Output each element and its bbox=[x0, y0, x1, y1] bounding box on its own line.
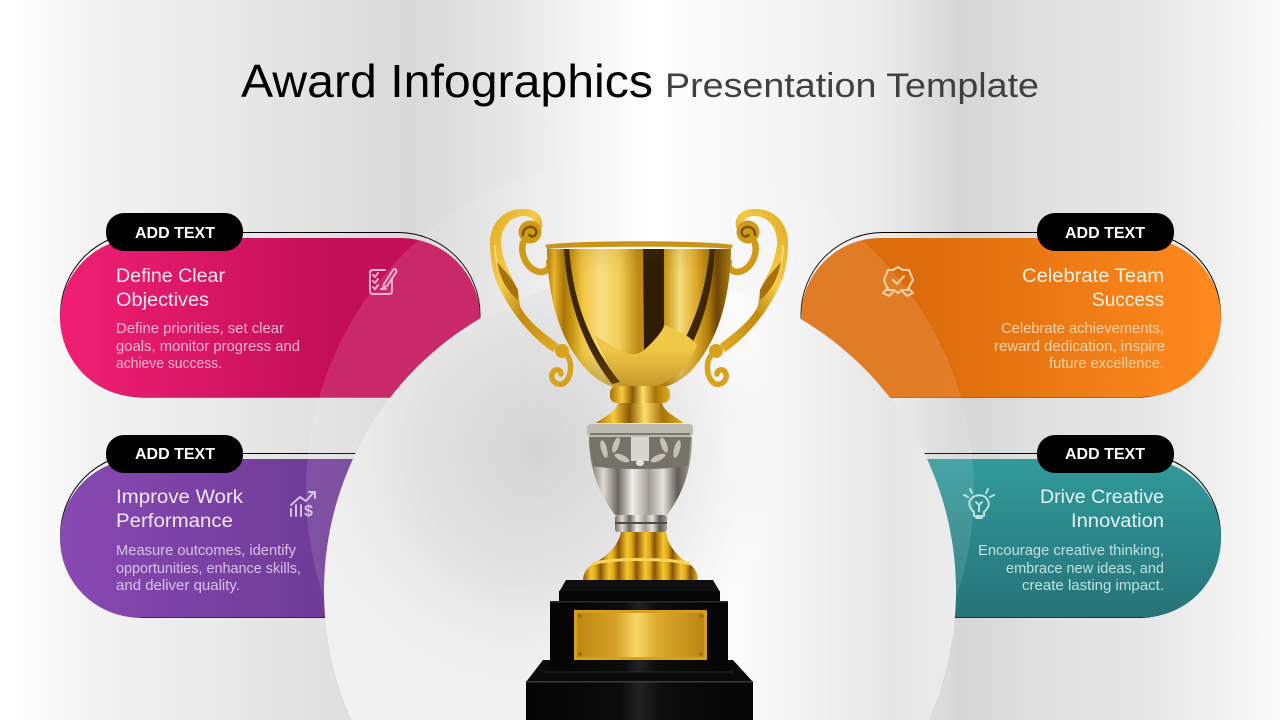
text: drive creative innovation: Encourage creative thinking, bbox=[978, 543, 1164, 559]
text: define clear objectives: goals, monitor progress and bbox=[116, 339, 300, 355]
label pill: top right: ADD TEXT bbox=[1065, 225, 1145, 242]
text: drive creative innovation bbox=[978, 487, 1164, 594]
right handle bbox=[707, 209, 788, 384]
label pill: bottom left bbox=[106, 435, 243, 473]
text: improve work performance bbox=[116, 487, 301, 594]
gold bowl bbox=[547, 249, 731, 387]
label pill: bottom left: ADD TEXT bbox=[135, 446, 215, 463]
text: celebrate team success: Success bbox=[1092, 290, 1164, 311]
gold foot bbox=[583, 532, 698, 585]
label pill: top right bbox=[1037, 213, 1174, 251]
text: celebrate team success: future excellence. bbox=[1049, 356, 1164, 372]
text: improve work performance: opportunities, enhance skills, bbox=[116, 561, 301, 577]
text: improve work performance: and deliver quality. bbox=[116, 578, 240, 594]
label pill: bottom right bbox=[1037, 435, 1174, 473]
text: celebrate team success: Celebrate Team bbox=[1022, 266, 1164, 287]
text: improve work performance: Performance bbox=[116, 511, 233, 532]
card shape: pink bbox=[60, 232, 480, 397]
text: celebrate team success: reward dedication, inspire bbox=[994, 339, 1165, 355]
icon: checklist and pen bbox=[370, 269, 396, 294]
text: celebrate team success bbox=[994, 266, 1165, 372]
title bbox=[241, 55, 1039, 107]
gold stem and knob bbox=[596, 386, 684, 423]
silver vase bbox=[587, 424, 693, 532]
text: define clear objectives: achieve success. bbox=[116, 356, 222, 372]
text: celebrate team success: Celebrate achievements, bbox=[1001, 321, 1164, 337]
label pill: top left bbox=[106, 213, 243, 251]
translucent outer circle bbox=[306, 156, 974, 720]
label pill: bottom right: ADD TEXT bbox=[1065, 446, 1145, 463]
icon: growth chart with dollar bbox=[291, 492, 315, 520]
text: define clear objectives bbox=[116, 266, 300, 372]
trophy bbox=[490, 209, 788, 720]
lower base tier bbox=[526, 660, 753, 720]
card shape: purple bbox=[60, 454, 480, 618]
card shape: orange bbox=[801, 232, 1221, 397]
label pill: top left: ADD TEXT bbox=[135, 225, 215, 242]
text: define clear objectives: Define Clear bbox=[116, 266, 226, 287]
rim bbox=[545, 241, 733, 249]
icon: award ribbon bbox=[883, 267, 913, 296]
card shape: teal bbox=[801, 454, 1221, 618]
left handle bbox=[490, 209, 571, 384]
gold plaque bbox=[574, 610, 707, 660]
text: drive creative innovation: embrace new ideas, and bbox=[1006, 561, 1164, 577]
text: define clear objectives: Define priorities, set clear bbox=[116, 321, 284, 337]
text: drive creative innovation: create lasting impact. bbox=[1022, 578, 1164, 594]
text: drive creative innovation: Drive Creative bbox=[1040, 487, 1164, 508]
text: drive creative innovation: Innovation bbox=[1071, 511, 1164, 532]
central disc bbox=[324, 275, 956, 720]
upper base tier bbox=[550, 580, 728, 672]
text: define clear objectives: Objectives bbox=[116, 290, 209, 311]
title: Award Infographics bbox=[241, 55, 653, 107]
text: improve work performance: Improve Work bbox=[116, 487, 244, 508]
text: improve work performance: Measure outcomes, identify bbox=[116, 543, 297, 559]
icon: light bulb bbox=[964, 489, 994, 518]
icon: growth chart with dollar: $ bbox=[304, 503, 313, 520]
title: Presentation Template bbox=[665, 67, 1039, 105]
